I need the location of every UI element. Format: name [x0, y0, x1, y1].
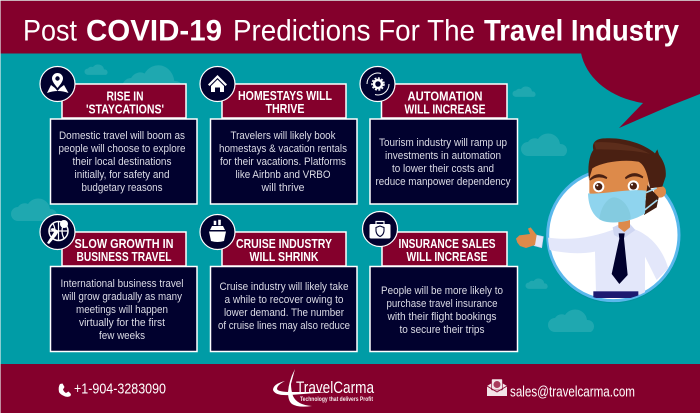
icon: envelope	[487, 379, 507, 396]
speech bubble	[581, 53, 700, 128]
heading: insurance sales: WILL INCREASE	[406, 249, 488, 264]
head	[588, 138, 666, 215]
title: Post	[23, 14, 78, 48]
text block: staycations: budgetary reasons	[82, 182, 163, 194]
contact: email	[487, 379, 635, 400]
icon: house	[200, 66, 235, 102]
text block: business travel: meetings will happen	[76, 304, 168, 316]
panel: automation	[360, 66, 518, 204]
text block: homestays: Travelers will likely book	[230, 130, 336, 142]
text block: homestays: homestays & vacation rentals	[219, 143, 347, 155]
heading: homestays: HOMESTAYS WILL	[238, 88, 332, 103]
heading: homestays: THRIVE	[266, 101, 305, 116]
text block: insurance sales	[370, 266, 518, 352]
text block: insurance sales: to secure their trips	[400, 324, 485, 336]
heading: rise in staycations	[62, 84, 186, 118]
contact: email: sales@travelcarma.com	[510, 384, 635, 400]
heading: cruise industry	[222, 232, 346, 266]
face mask	[588, 188, 657, 222]
title: COVID-19	[86, 14, 222, 48]
text block: business travel: International business travel	[60, 278, 184, 290]
text block: homestays: will thrive	[261, 182, 304, 194]
icon: briefcase with shield	[362, 212, 398, 246]
logo swoosh	[273, 369, 330, 407]
heading: insurance sales	[382, 232, 507, 266]
heading: cruise industry: CRUISE INDUSTRY	[236, 236, 332, 251]
panel: cruise industry	[200, 214, 357, 352]
text block: cruise industry: lower demand. The number	[224, 307, 344, 319]
logo: TravelCarma: TravelCarma	[296, 378, 374, 397]
text block: staycations: initially, for safety and	[74, 169, 170, 181]
footer band	[0, 364, 700, 413]
panel: business travel	[40, 214, 197, 352]
text block: homestays	[210, 119, 357, 204]
hand	[516, 227, 537, 248]
icon: map pin	[40, 66, 75, 102]
icon: phone	[59, 384, 71, 397]
icon: cruise ship	[200, 214, 235, 250]
text block: insurance sales: purchase travel insurance	[386, 298, 498, 310]
portrait circle	[547, 169, 680, 303]
heading: business travel	[62, 232, 186, 266]
logo: TravelCarma	[273, 369, 374, 407]
text block: automation: to lower their costs and	[392, 163, 494, 175]
panel: homestays	[200, 66, 357, 204]
heading: automation: AUTOMATION	[408, 88, 482, 104]
title: Travel Industry	[484, 14, 679, 48]
heading: automation	[382, 84, 507, 118]
heading: business travel: BUSINESS TRAVEL	[76, 249, 172, 264]
text block: homestays: for their vacations. Platforms	[220, 156, 346, 168]
heading: insurance sales: INSURANCE SALES	[398, 236, 496, 251]
text block: business travel	[50, 266, 197, 352]
icon: gear	[360, 66, 395, 102]
heading: homestays	[222, 84, 346, 118]
contact: phone: +1-904-3283090	[74, 380, 166, 398]
heading: rise in staycations: 'STAYCATIONS'	[86, 102, 164, 116]
panel: insurance sales	[362, 212, 518, 352]
text block: cruise industry: a while to recover owing to	[224, 294, 344, 306]
text block: business travel: few weeks	[99, 330, 145, 342]
text block: cruise industry: of cruise lines may also reduce	[218, 320, 350, 332]
text block: staycations: their local destinations	[72, 156, 172, 168]
heading: automation: WILL INCREASE	[404, 102, 486, 116]
text block: staycations	[50, 119, 197, 204]
illustration: presenter wearing a mask	[516, 138, 680, 303]
text block: business travel: will grow gradually as many	[61, 291, 182, 303]
text block: staycations: people will choose to explore	[58, 143, 186, 155]
text block: business travel: virtually for the first	[79, 317, 165, 329]
panel: rise in staycations	[40, 66, 197, 204]
text block: automation: investments in automation	[385, 150, 501, 162]
heading: cruise industry: WILL SHRINK	[250, 249, 319, 264]
heading: business travel: SLOW GROWTH IN	[74, 236, 174, 251]
text block: homestays: like Airbnb and VRBO	[236, 169, 331, 181]
text block: cruise industry: Cruise industry will likely take	[220, 281, 348, 293]
title: Predictions For The	[233, 14, 475, 48]
text block: insurance sales: People will be more likely to	[381, 285, 503, 297]
text block: staycations: Domestic travel will boom as	[59, 130, 185, 142]
header band	[0, 0, 700, 54]
shirt and tie	[534, 220, 668, 298]
text block: automation: reduce manpower dependency	[376, 176, 511, 188]
logo: TravelCarma: Technology that delivers Profit	[300, 397, 373, 403]
heading: rise in staycations: RISE IN	[106, 88, 144, 104]
text block: automation: Tourism industry will ramp up	[379, 137, 507, 149]
text block: insurance sales: with their flight bookings	[387, 311, 497, 323]
text block: automation	[370, 119, 518, 204]
icon: globe with plane	[40, 214, 75, 250]
title	[23, 14, 679, 48]
text block: cruise industry	[210, 266, 357, 352]
